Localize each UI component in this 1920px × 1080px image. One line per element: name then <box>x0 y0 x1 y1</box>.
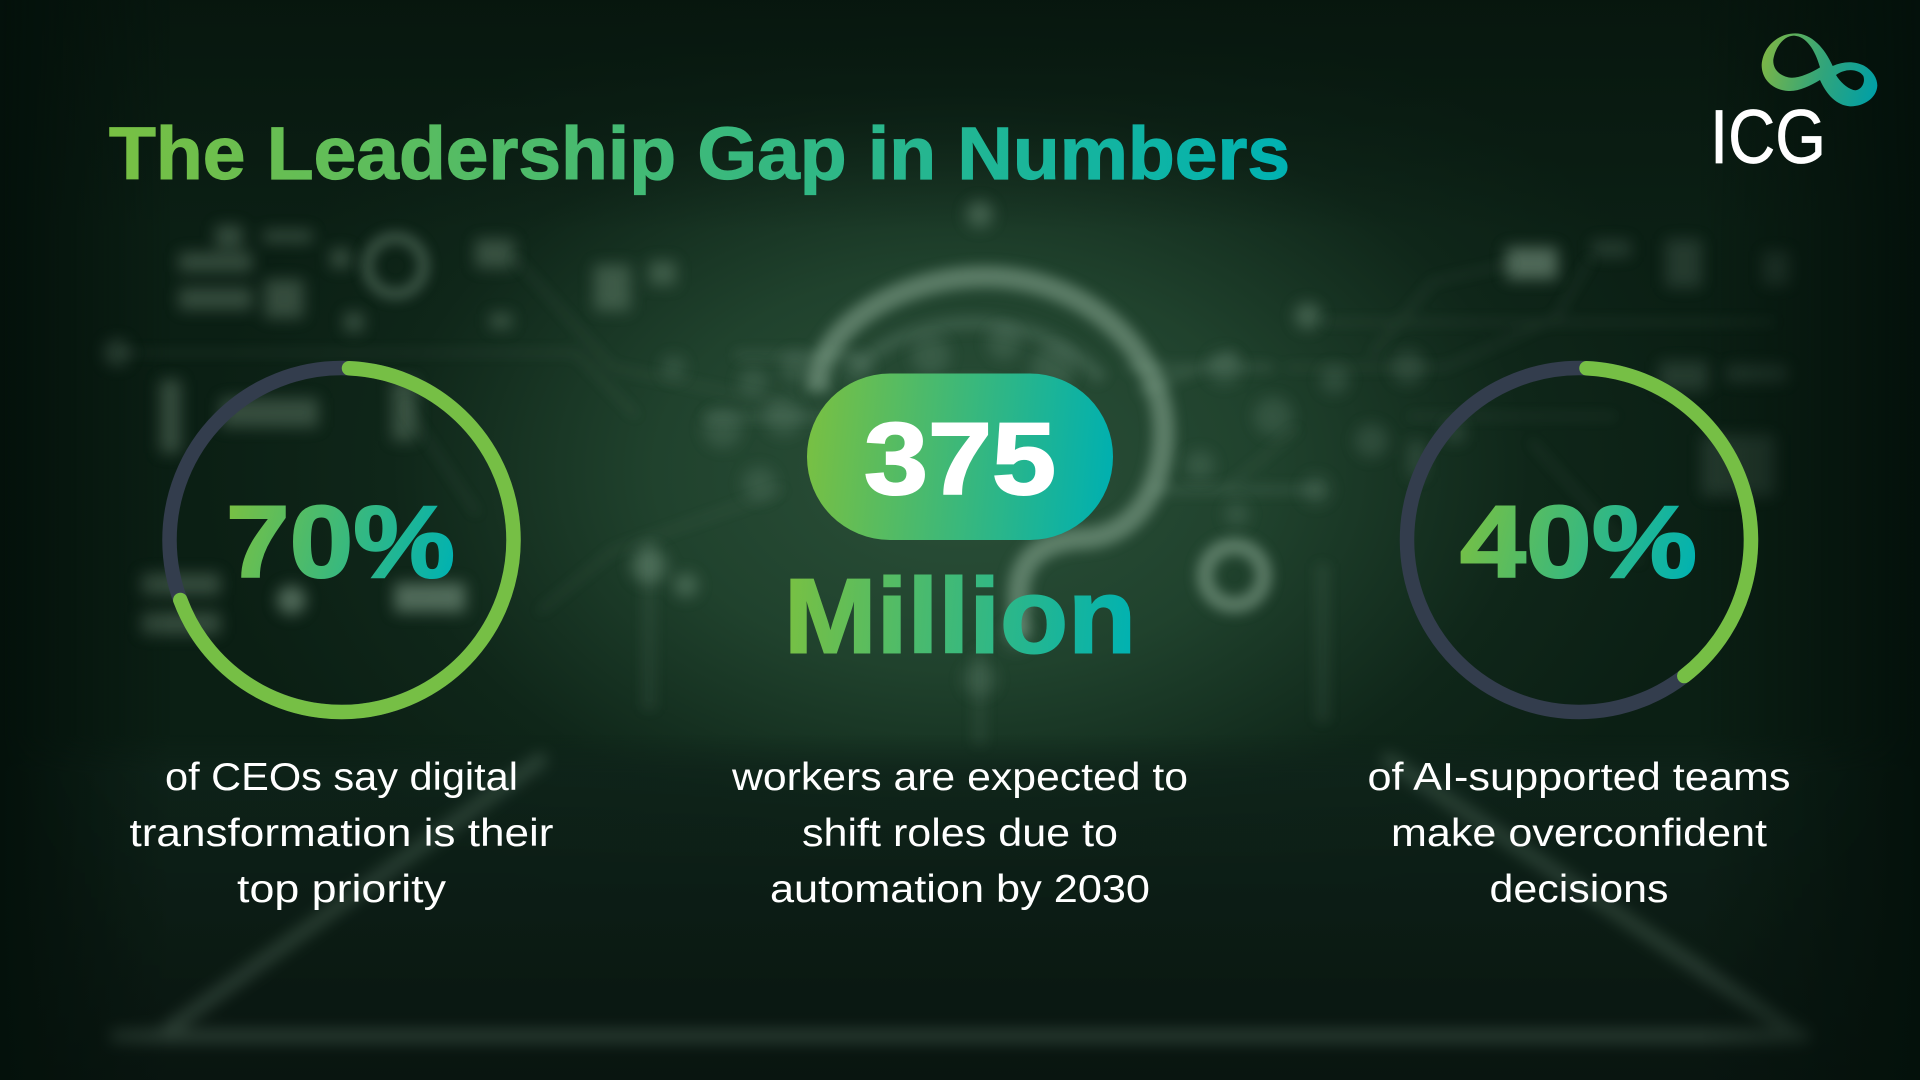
stat: 40%: 40% <box>1460 485 1697 599</box>
stat: 70%: 70% <box>226 485 455 599</box>
title: The Leadership Gap in Numbers <box>109 112 1290 195</box>
pill: 375: 375 <box>864 402 1056 516</box>
floor overlay <box>0 735 1920 1080</box>
description: AI teams: decisions <box>1490 868 1668 911</box>
pill: 375 <box>807 374 1113 540</box>
description: workers: shift roles due to <box>802 812 1118 855</box>
logo: ICG <box>1710 33 1877 180</box>
panel: 40% of AI-supported teams <box>1368 368 1790 911</box>
panel: 70% of CEOs <box>130 368 554 911</box>
description: AI teams: make overconfident <box>1391 812 1767 855</box>
description: workers: workers are expected to <box>731 756 1188 799</box>
description: AI teams: of AI-supported teams <box>1368 756 1790 799</box>
donut chart: 40% <box>1407 368 1751 712</box>
description: AI teams <box>1368 756 1790 911</box>
description: CEOs: top priority <box>237 868 447 911</box>
logo wordmark: ICG <box>1710 95 1826 180</box>
description: workers <box>731 756 1188 911</box>
donut chart: 70% <box>170 368 514 712</box>
description: CEOs: of CEOs say digital <box>165 756 518 799</box>
description: CEOs <box>130 756 554 911</box>
description: CEOs: transformation is their <box>130 812 554 855</box>
stat: Million: Million <box>784 558 1136 676</box>
icon: infinity ribbon <box>1762 33 1877 106</box>
panel: 375 Million <box>731 374 1188 911</box>
description: workers: automation by 2030 <box>770 868 1150 911</box>
